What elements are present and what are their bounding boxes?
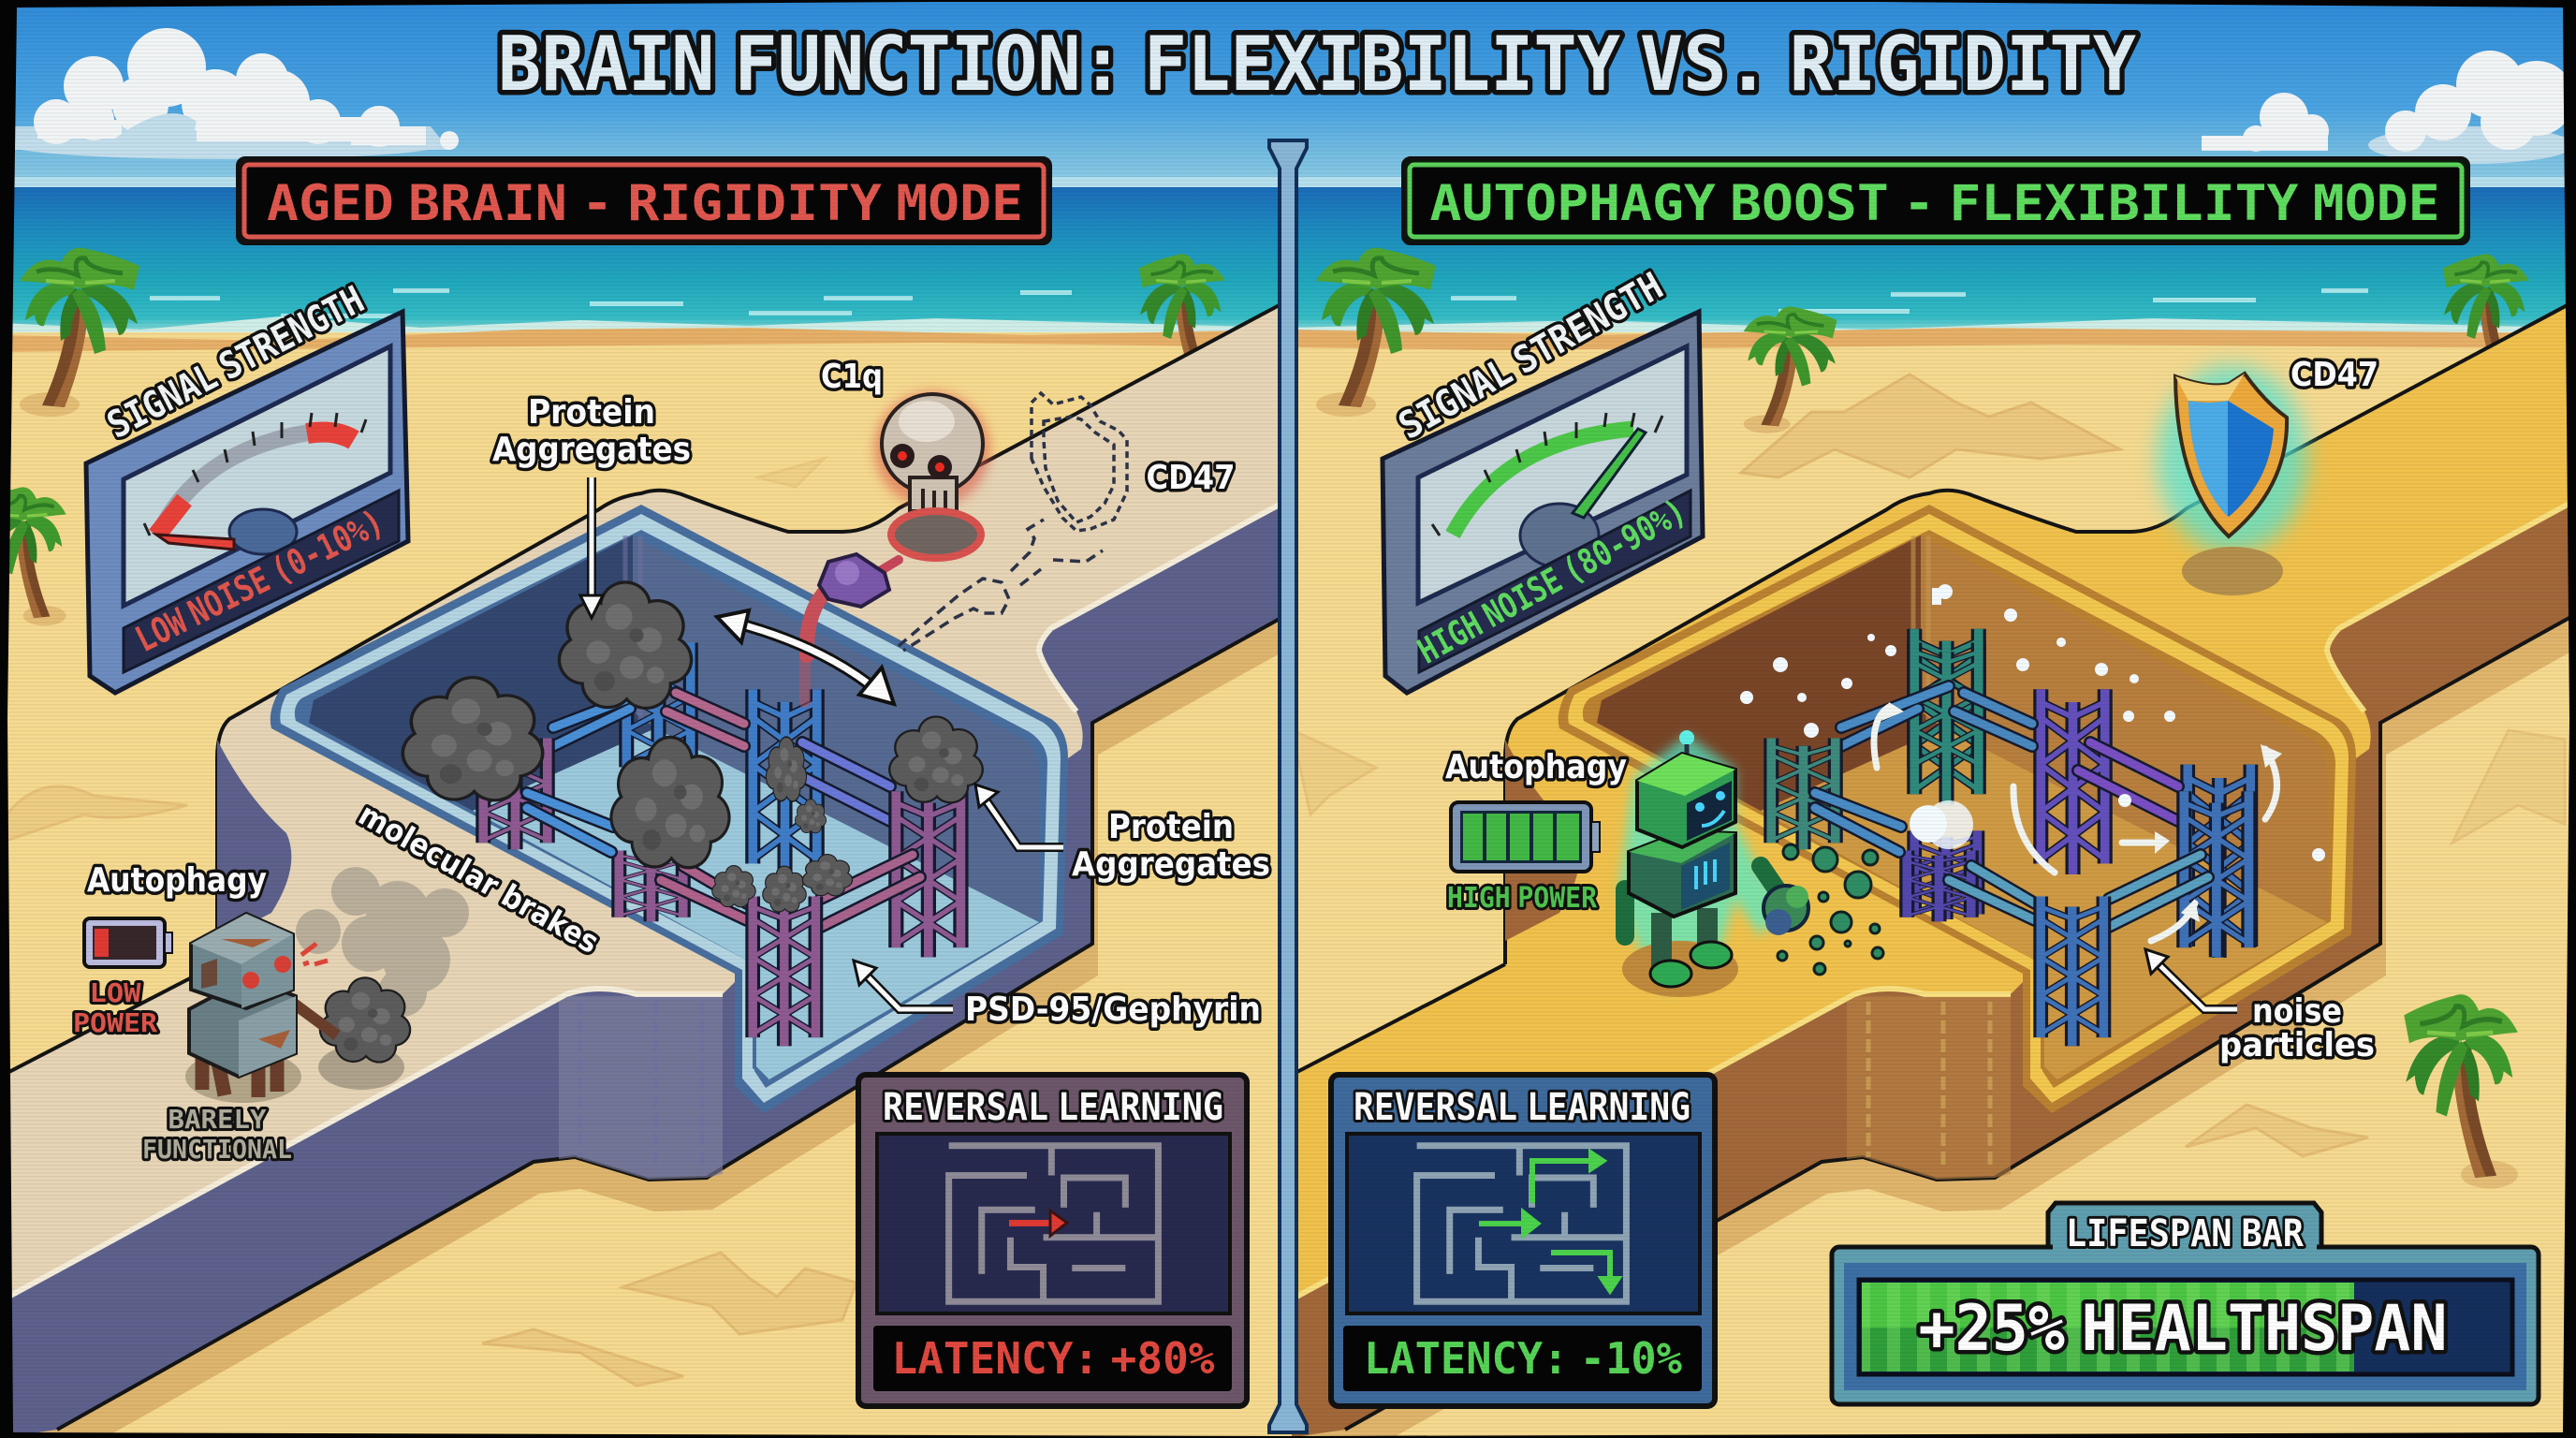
tab [2048, 1203, 2321, 1259]
label: protein aggregates top [492, 393, 691, 469]
track [1859, 1280, 2512, 1374]
green fill [1862, 1283, 2354, 1372]
label: noise particles: noise [2252, 992, 2342, 1031]
gauge face [124, 346, 390, 606]
cloud left [9, 28, 459, 159]
robot: green healthy [1625, 730, 1783, 987]
label: protein aggregates top: Protein [528, 393, 655, 432]
dashed ghost shield: CD47 missing [1032, 393, 1127, 531]
label: protein aggregates right: Aggregates [1072, 845, 1270, 884]
latency readout [873, 1326, 1232, 1391]
shield glow [2158, 365, 2307, 552]
gauge readout [1419, 491, 1690, 672]
label: autophagy left: Autophagy [87, 861, 267, 900]
maze walls [1417, 1146, 1626, 1301]
panel: right autophagy boost [1284, 301, 2576, 1438]
latency text: LATENCY: +80% [891, 1333, 1215, 1384]
receptor stem and link [805, 560, 899, 702]
label: CD47: CD47 [1146, 459, 1236, 497]
extra tall towers behind lattice [1914, 629, 2250, 958]
icon: skull [874, 391, 990, 511]
palms [0, 248, 2529, 625]
reversal learning panel right [1331, 1075, 1715, 1406]
label: C1q: C1q [821, 358, 883, 396]
label: molecular brakes: molecular brakes [353, 796, 606, 961]
synapse scaffold lattice [483, 643, 960, 1046]
reversal learning panel left [858, 1075, 1247, 1406]
robot: rusty low power [185, 914, 337, 1103]
lifespan bar [1832, 1203, 2539, 1404]
robot glow [1619, 735, 1788, 992]
label: low power: LOW [90, 977, 141, 1008]
header text: AUTOPHAGY BOOST - FLEXIBILITY MODE [1430, 175, 2439, 232]
protein aggregates in basin [401, 580, 984, 913]
frame [1832, 1247, 2539, 1404]
readout text: LOW NOISE (0-10%) [129, 502, 390, 660]
tab cover [2053, 1240, 2317, 1263]
swirl arrows white [1874, 707, 2276, 941]
aggregate shadow [318, 1049, 404, 1090]
panel: left aged brain [0, 301, 1290, 1438]
gauge arc [1432, 413, 1662, 536]
isometric road and basin [1284, 301, 2576, 1438]
label: low power [73, 977, 157, 1038]
purple receptor [819, 554, 889, 607]
green path arrows [1479, 1153, 1617, 1290]
bar text: +25% HEALTHSPAN [1919, 1292, 2447, 1366]
double arrow [717, 610, 894, 704]
synapse scaffold lattice [1771, 643, 2248, 1046]
complement receptor ring [891, 511, 981, 558]
green debris particles [1778, 844, 1883, 975]
label: high power: HIGH POWER [1447, 882, 1598, 915]
panel title: REVERSAL LEARNING [883, 1086, 1223, 1129]
readout text: HIGH NOISE (80-90%) [1412, 492, 1692, 671]
arrow PSD [854, 961, 953, 1009]
label: barely functional [142, 1104, 292, 1165]
header: autophagy boost [1403, 158, 2468, 243]
gauge hub [229, 509, 297, 554]
gauge face [1418, 346, 1687, 603]
icon: full battery [1451, 802, 1600, 872]
label: low power: POWER [73, 1007, 157, 1038]
gauge frame [1383, 312, 1703, 693]
gauge readout [124, 491, 399, 672]
arrow right aggregates [975, 785, 1063, 847]
isometric road and basin [0, 301, 1290, 1438]
beach sand [0, 328, 2576, 1438]
label: noise particles [2219, 992, 2375, 1064]
gauge needle [1573, 429, 1646, 518]
label: protein aggregates top: Aggregates [492, 431, 691, 469]
palm lower right [2404, 994, 2518, 1189]
latency readout [1343, 1326, 1702, 1391]
aggregate held by robot [319, 976, 411, 1064]
gauge arc [144, 413, 366, 536]
title: BRAIN FUNCTION: FLEXIBILITY VS. RIGIDITY [498, 21, 2136, 108]
label: PSD-95/Gephyrin: PSD-95/Gephyrin [965, 990, 1261, 1029]
label: barely functional: FUNCTIONAL [142, 1134, 292, 1165]
noise particles white [1740, 584, 2325, 861]
shield shadow [2182, 547, 2283, 595]
maze screen [877, 1134, 1230, 1313]
sand dunes [0, 374, 2565, 1386]
arrow to aggregate [580, 477, 603, 618]
gauge hub [1520, 504, 1599, 567]
gauge left [86, 278, 408, 693]
icon: CD47 shield [2175, 374, 2287, 536]
header text: AGED BRAIN - RIGIDITY MODE [267, 175, 1023, 232]
icon: low battery [84, 918, 172, 967]
tab label: LIFESPAN BAR [2066, 1212, 2305, 1255]
latency text: LATENCY: -10% [1364, 1333, 1682, 1384]
sea [0, 177, 2576, 339]
label: protein aggregates right: Protein [1108, 808, 1234, 846]
cloud right [2202, 51, 2574, 164]
label: CD47 right: CD47 [2291, 356, 2378, 394]
swirl arrow heads [1881, 702, 2282, 922]
dashed ghost receptor [899, 520, 1103, 651]
maze screen [1347, 1134, 1700, 1313]
maze walls [949, 1146, 1158, 1301]
center divider [1269, 140, 1307, 1432]
label: noise particles: particles [2219, 1026, 2375, 1064]
smoke cloud [296, 867, 469, 1017]
sky background [0, 0, 2576, 180]
title signal strength: SIGNAL STRENGTH [101, 278, 371, 448]
panel title: REVERSAL LEARNING [1354, 1086, 1690, 1129]
arrow noise [2145, 949, 2237, 1009]
gauge right [1383, 265, 1703, 693]
red path arrow [1009, 1211, 1067, 1236]
robot shadow [1622, 941, 1738, 997]
header: aged brain [238, 158, 1050, 243]
title signal strength: SIGNAL STRENGTH [1392, 265, 1670, 448]
aggregate cleared in hand [1764, 886, 1808, 935]
gauge frame [86, 312, 408, 693]
gauge needle [156, 535, 234, 550]
label: protein aggregates right [1072, 808, 1270, 884]
label: autophagy right: Autophagy [1445, 748, 1627, 786]
label: barely functional: BARELY [168, 1104, 267, 1135]
